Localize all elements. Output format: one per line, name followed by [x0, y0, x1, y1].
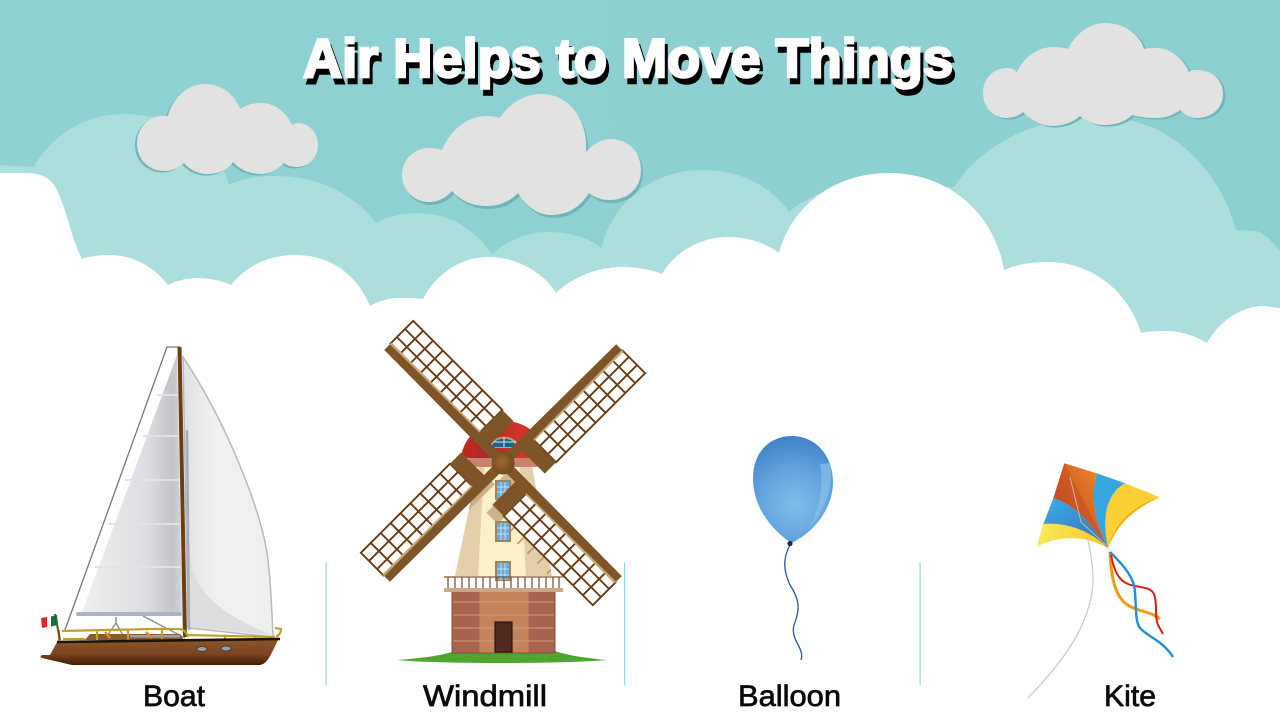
- balloon knot: [787, 541, 793, 546]
- portholes: [197, 646, 231, 652]
- blade: lower left: [361, 442, 501, 583]
- illustration: balloon: [753, 436, 833, 660]
- kite tail: blue: [1110, 552, 1173, 657]
- hub: [492, 452, 514, 474]
- balloon highlight: [810, 463, 831, 527]
- blade: lower right: [482, 465, 623, 605]
- kite panel: left yellow: [1037, 524, 1108, 548]
- white foreground cloud layer: [0, 173, 1280, 720]
- yellow rail: [59, 628, 281, 641]
- illustration: windmill: [361, 321, 645, 663]
- kite panel: orange shaded fold: [1053, 463, 1108, 548]
- kite frame: [1070, 477, 1106, 545]
- illustration: kite: [1028, 463, 1173, 698]
- kite panel: orange: [1053, 463, 1108, 548]
- tower window: lower: [495, 561, 511, 581]
- kite tail: red: [1111, 555, 1163, 634]
- cloud: right: [983, 23, 1226, 128]
- tower: [455, 466, 552, 576]
- kite tail: orange: [1110, 552, 1160, 619]
- balloon body: [753, 436, 833, 542]
- dormer window: [489, 437, 519, 448]
- kite panel: left blue: [1043, 498, 1108, 548]
- door: [495, 622, 512, 652]
- kite panel: right yellow: [1105, 483, 1160, 548]
- boom: [76, 612, 182, 616]
- title: Air Helps to Move Things: [303, 27, 953, 89]
- flag: [41, 614, 60, 640]
- label: Boat: Boat: [143, 680, 206, 713]
- title: Air Helps to Move Things: [306, 33, 956, 95]
- hull: [40, 640, 278, 665]
- kite string: [1028, 477, 1093, 698]
- tower window: middle: [495, 521, 511, 542]
- blade shadows on tower: [468, 474, 551, 574]
- label: Windmill: Windmill: [423, 680, 547, 713]
- kite panel: right blue: [1094, 473, 1125, 548]
- mast: [180, 347, 189, 637]
- deck line: [57, 639, 280, 642]
- divider: balloon and kite: [920, 562, 921, 685]
- illustration: sailboat: [40, 347, 281, 665]
- main sail: [82, 355, 182, 612]
- grass: [397, 650, 607, 663]
- divider: boat and windmill: [326, 562, 327, 685]
- blade: upper right: [505, 343, 645, 484]
- tower window: upper: [495, 480, 511, 500]
- deck house: [85, 632, 184, 640]
- forestay rigging: [65, 347, 180, 630]
- jib sail: [183, 357, 273, 637]
- kite panel: right yellow edge: [1108, 497, 1160, 548]
- label: Kite: Kite: [1104, 680, 1156, 713]
- dome band: [468, 458, 540, 467]
- brick base: [452, 591, 555, 653]
- balloon ribbon: [785, 545, 802, 660]
- balcony: [444, 577, 563, 592]
- boom vang and supports: [105, 616, 185, 639]
- jib shading: [188, 560, 272, 635]
- cloud: centre: [402, 94, 643, 218]
- blade: upper left: [383, 321, 524, 461]
- cloud: left: [135, 84, 318, 176]
- label: Balloon: Balloon: [738, 680, 841, 713]
- divider: windmill and balloon: [624, 562, 625, 685]
- dome cap: [461, 421, 546, 458]
